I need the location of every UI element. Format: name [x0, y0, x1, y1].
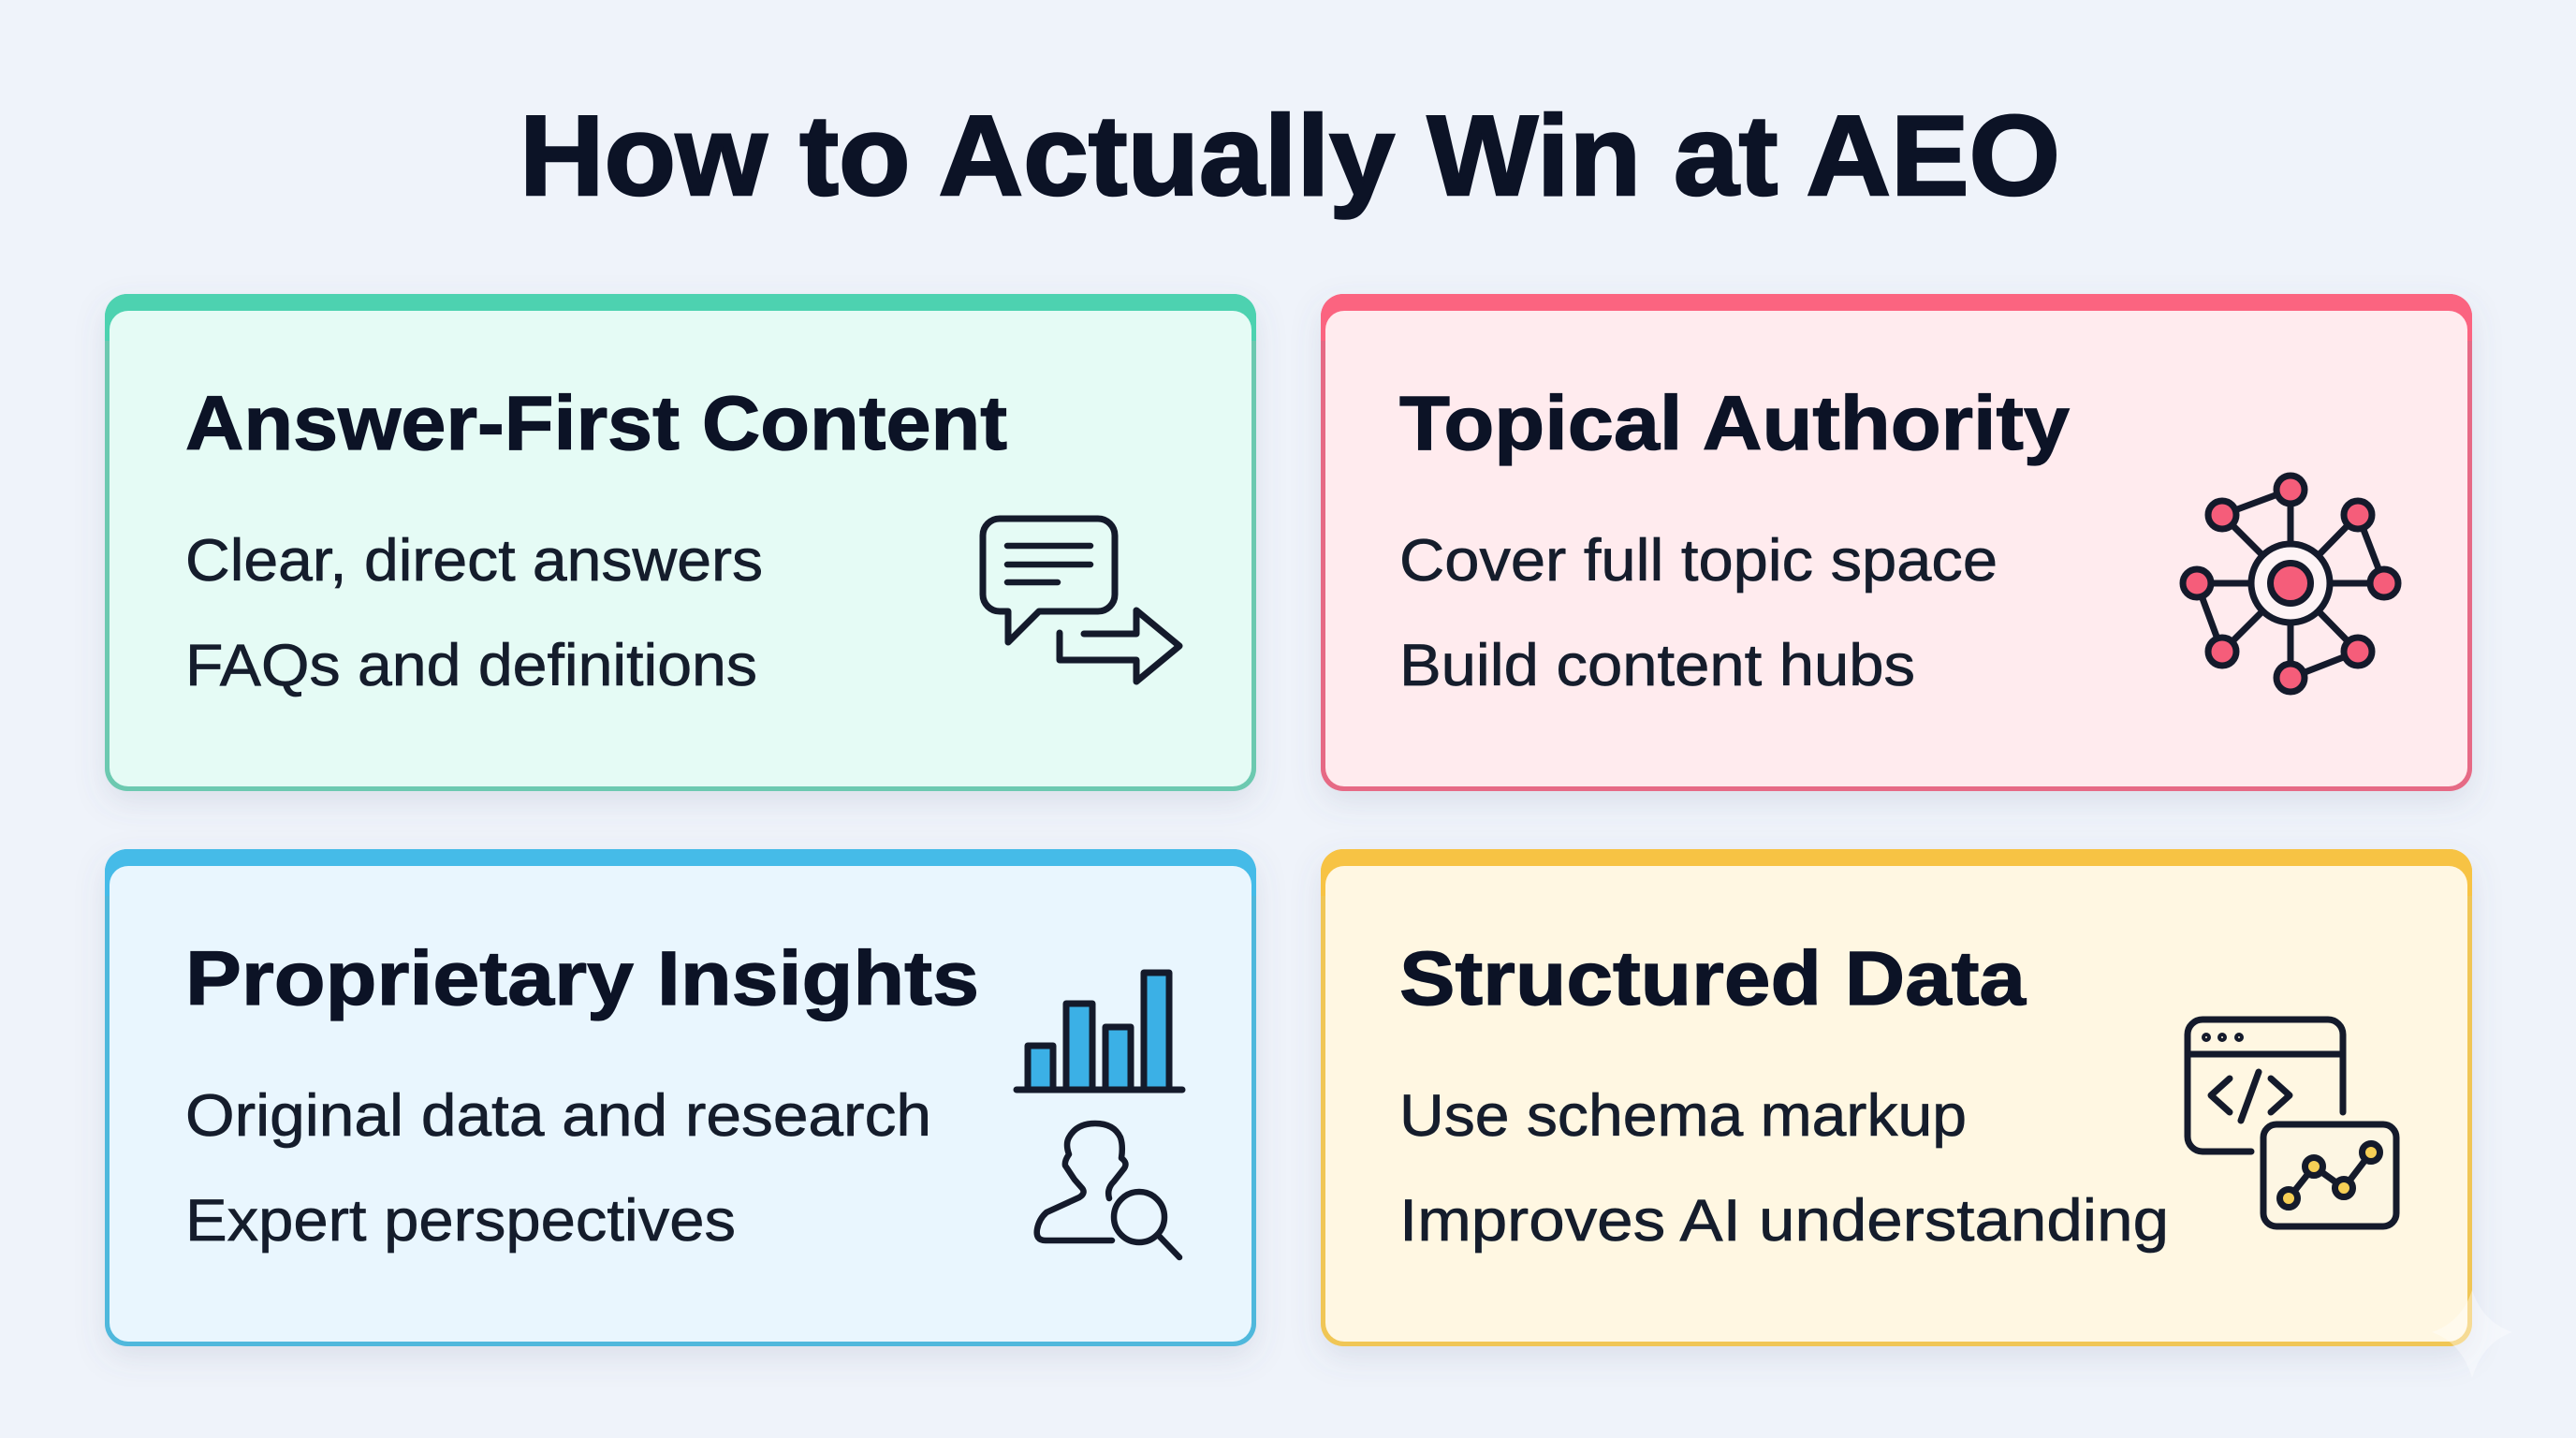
panel: Answer-First Content	[105, 294, 1256, 791]
text: Expert perspectives: Expert perspectives	[185, 1188, 736, 1254]
panel: Topical Authority	[1321, 294, 2472, 791]
heading: Answer-First Content: Answer-First Content	[185, 381, 1007, 466]
panel: Structured Data	[1321, 849, 2472, 1346]
text: Use schema markup: Use schema markup	[1399, 1083, 1967, 1149]
icon: expert with magnifier	[1037, 1123, 1179, 1257]
icon: speech bubble and arrow	[983, 519, 1179, 682]
text: Cover full topic space: Cover full topic space	[1399, 528, 1998, 594]
heading: Proprietary Insights: Proprietary Insights	[185, 936, 979, 1021]
text: Improves AI understanding: Improves AI understanding	[1399, 1188, 2169, 1254]
text: Build content hubs: Build content hubs	[1399, 633, 1915, 698]
icon: bar chart	[1017, 973, 1182, 1090]
text: Original data and research: Original data and research	[185, 1083, 931, 1149]
text: FAQs and definitions: FAQs and definitions	[185, 633, 757, 698]
heading: Topical Authority: Topical Authority	[1399, 381, 2070, 466]
text: Clear, direct answers: Clear, direct answers	[185, 528, 763, 594]
icon: code window	[2188, 1020, 2343, 1152]
icon: line chart card	[2263, 1124, 2396, 1226]
title: How to Actually Win at AEO	[520, 92, 2060, 219]
heading: Structured Data: Structured Data	[1399, 936, 2027, 1021]
panel: Proprietary Insights	[105, 849, 1256, 1346]
icon: sparkle watermark	[2432, 1290, 2512, 1378]
icon: topic network	[2183, 476, 2398, 692]
